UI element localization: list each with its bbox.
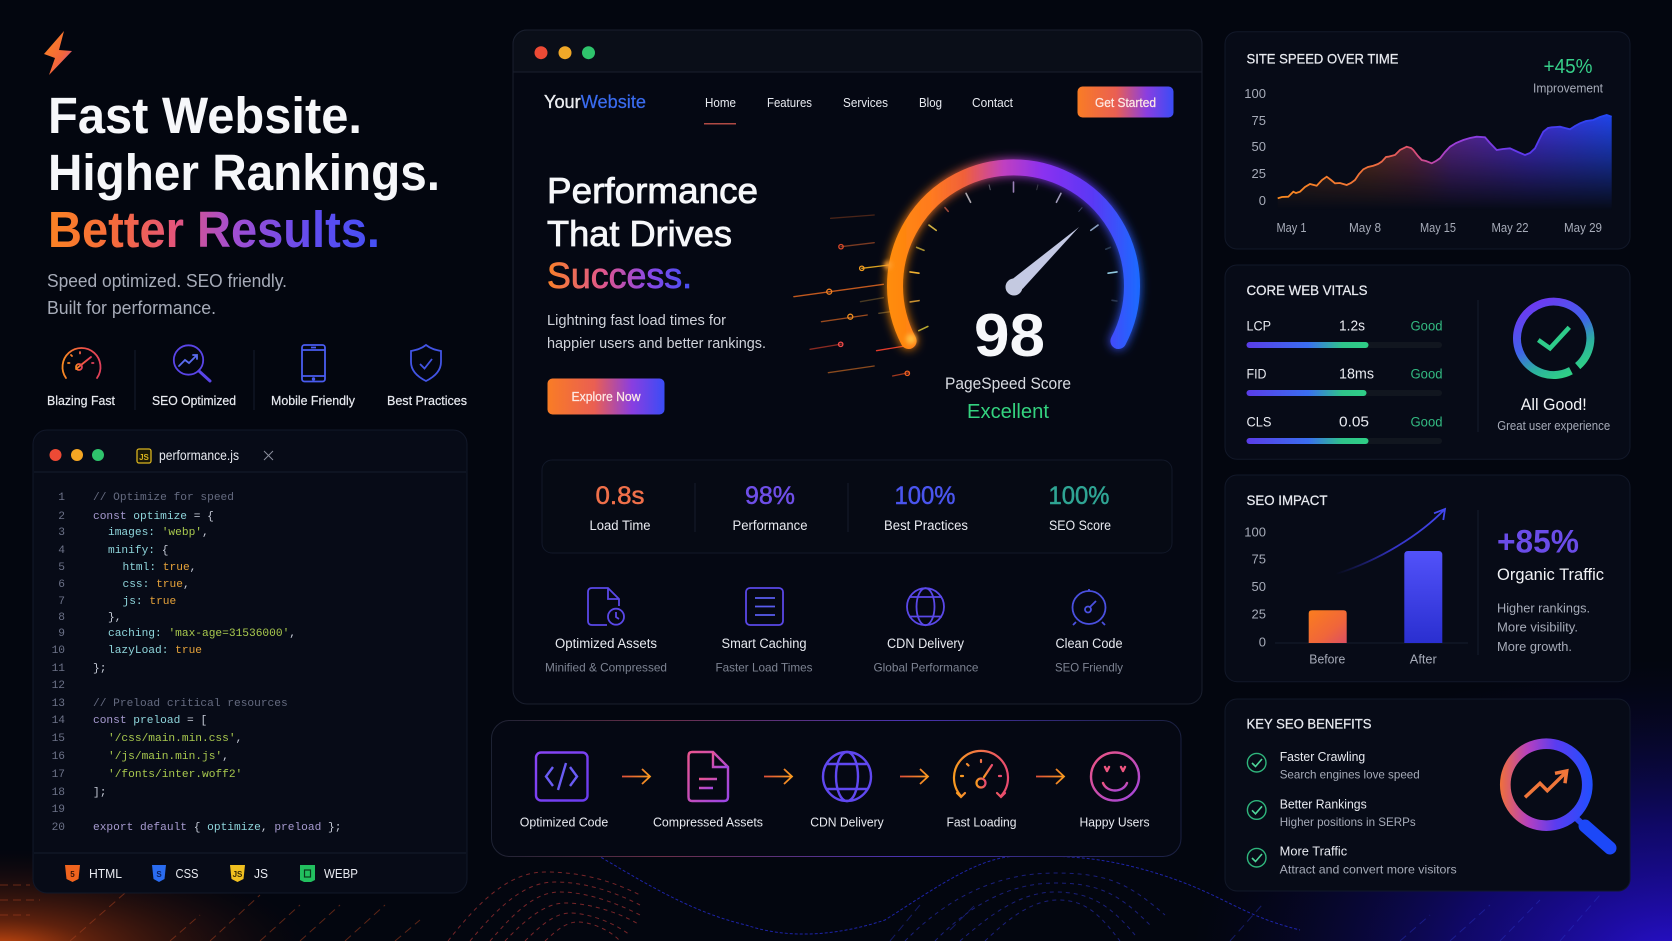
icon: lightning bolt logo xyxy=(44,31,72,75)
arrow xyxy=(1036,769,1064,784)
navigation xyxy=(704,96,1013,124)
title: Fast Website. xyxy=(48,87,362,144)
hero heading: Performance xyxy=(547,170,758,211)
code listing: 4 xyxy=(58,545,65,557)
area chart xyxy=(1244,86,1612,235)
feature: Optimized Assets: Optimized Assets xyxy=(555,636,657,651)
bar chart: 100 xyxy=(1244,524,1266,540)
button: Get Started: Get Started xyxy=(1095,96,1156,110)
code listing: caching: 'max-age=31536000', xyxy=(108,628,296,640)
label: All Good: All Good! xyxy=(1521,395,1587,414)
step: Compressed Assets xyxy=(653,752,763,830)
code listing: 15 xyxy=(52,733,65,745)
tech tags: HTML, CSS, JS, WEBP: WEBP xyxy=(324,866,358,881)
metric: CLS: Good xyxy=(1410,414,1442,430)
area chart: May 8 xyxy=(1349,221,1381,235)
code listing: 11 xyxy=(52,663,65,675)
feature: CDN Delivery: CDN Delivery xyxy=(887,636,964,651)
subtitle text: Speed optimized. SEO friendly. xyxy=(47,270,287,291)
step: CDN Delivery xyxy=(810,752,884,830)
code listing: 20 xyxy=(52,822,65,834)
area chart: 50 xyxy=(1252,139,1266,154)
code listing: css: true, xyxy=(122,579,190,591)
feature: Smart Caching xyxy=(716,588,812,674)
area chart: May 1 xyxy=(1276,221,1307,235)
tech tags: HTML, CSS, JS, WEBP: JS xyxy=(254,866,268,881)
metric: LCP: LCP xyxy=(1246,318,1271,334)
benefit: Better Rankings xyxy=(1247,797,1416,829)
step: Optimized Code: Optimized Code xyxy=(520,814,608,830)
code listing: html: true, xyxy=(122,562,196,574)
bar chart: 0 xyxy=(1259,634,1266,650)
text block: benefits: More growth. xyxy=(1497,639,1572,654)
stat: performance xyxy=(732,482,808,533)
title xyxy=(48,87,440,258)
panel: optimization pipeline xyxy=(492,720,1181,856)
tech tags: HTML, CSS, JS, WEBP: JS xyxy=(233,870,243,879)
benefit: Better Rankings: Higher positions in SERPs xyxy=(1280,815,1416,829)
button: Explore Now xyxy=(548,378,664,414)
navigation: Blog xyxy=(919,96,942,110)
label: Best Practices: Best Practices xyxy=(387,393,467,408)
step: Fast Loading xyxy=(946,751,1016,830)
benefit: More Traffic: More Traffic xyxy=(1280,845,1347,859)
code listing: 7 xyxy=(58,596,65,608)
arrow xyxy=(764,769,792,784)
step: Compressed Assets: Compressed Assets xyxy=(653,814,763,830)
icon: mobile phone xyxy=(302,345,325,382)
step: Fast Loading: Fast Loading xyxy=(946,814,1016,830)
area chart: 75 xyxy=(1252,113,1266,128)
panel: code editor xyxy=(33,430,467,893)
panel: core web vitals xyxy=(1225,265,1630,459)
arrow xyxy=(622,769,650,784)
code listing: '/js/main.min.js', xyxy=(108,751,229,763)
bar chart: Before xyxy=(1309,652,1345,666)
code listing: 13 xyxy=(52,698,65,710)
feature: Optimized Assets: Minified & Compressed xyxy=(545,660,667,674)
feature: CDN Delivery: Global Performance xyxy=(874,660,979,674)
code listing: const optimize = { xyxy=(93,511,214,523)
feature row: Blazing Fast, SEO Optimized, Mobile Friendly, Best Practices xyxy=(47,345,467,410)
status ring xyxy=(1504,289,1603,388)
step: Optimized Code xyxy=(520,752,608,830)
hero paragraph xyxy=(547,313,766,352)
feature: Smart Caching: Smart Caching xyxy=(722,636,806,651)
stat: load time: 0.8s xyxy=(596,482,644,510)
benefit: Faster Crawling xyxy=(1247,750,1420,781)
hero heading: That Drives xyxy=(547,213,732,254)
icon: shield check xyxy=(411,345,441,381)
code listing: '/fonts/inter.woff2' xyxy=(108,769,242,781)
speed streaks xyxy=(794,215,911,376)
icon: growth magnifier xyxy=(1505,744,1610,848)
code listing: 6 xyxy=(58,579,65,591)
code listing: 2 xyxy=(58,511,65,523)
area chart: May 29 xyxy=(1564,221,1602,235)
code listing: lazyLoad: true xyxy=(108,645,202,657)
code listing: // Preload critical resources xyxy=(93,698,288,710)
area chart: May 22 xyxy=(1492,221,1529,235)
code listing: ]; xyxy=(93,787,106,799)
stat: best practices: 100% xyxy=(894,482,956,510)
navigation: Features xyxy=(767,96,812,110)
metric: CLS xyxy=(1246,414,1442,444)
feature: Clean Code xyxy=(1055,589,1123,674)
step: Happy Users xyxy=(1080,752,1150,830)
tech tags: HTML, CSS, JS, WEBP: S xyxy=(156,870,162,879)
area chart: May 15 xyxy=(1420,221,1456,235)
stat: +45% improvement xyxy=(1533,56,1603,96)
gauge: PageSpeed arc, ticks and needle xyxy=(884,167,1132,344)
panel: site speed over time xyxy=(1225,32,1630,249)
stat: performance: Performance xyxy=(732,518,808,533)
feature: Optimized Assets xyxy=(545,588,667,674)
file tab: performance.js xyxy=(137,448,273,463)
feature: Clean Code: SEO Friendly xyxy=(1055,660,1123,674)
navigation: Home xyxy=(705,96,736,110)
area chart: 100 xyxy=(1244,86,1266,101)
metric: LCP: Good xyxy=(1410,318,1442,334)
metric: FID xyxy=(1246,366,1442,396)
code listing: // Optimize for speed xyxy=(93,492,234,504)
code listing: 16 xyxy=(52,751,65,763)
stat: SEO score: 100% xyxy=(1048,482,1110,510)
panel: key SEO benefits xyxy=(1225,699,1630,891)
stat: +45% improvement: +45% xyxy=(1544,56,1593,78)
code listing: 10 xyxy=(52,645,65,657)
file tab: performance.js: JS xyxy=(139,453,150,462)
stats strip xyxy=(542,460,1172,553)
heading: KEY SEO BENEFITS xyxy=(1246,715,1372,731)
code listing: 18 xyxy=(52,787,65,799)
window controls xyxy=(50,449,104,461)
stat: SEO score xyxy=(1048,482,1111,533)
hero paragraph: Lightning fast load times for xyxy=(547,313,726,329)
code listing: 3 xyxy=(58,527,65,539)
metric: FID: Good xyxy=(1410,366,1442,382)
button: Get Started xyxy=(1078,86,1174,118)
benefit: Faster Crawling: Faster Crawling xyxy=(1280,750,1365,764)
code listing: images: 'webp', xyxy=(108,527,209,539)
stat: best practices xyxy=(884,482,968,533)
label: great user experience: Great user experience xyxy=(1497,419,1610,433)
metric: LCP xyxy=(1246,318,1442,348)
label: Excellent: Excellent xyxy=(967,401,1049,423)
stat: +85%: +85% xyxy=(1497,524,1579,560)
icon: blazing fast gauge xyxy=(62,348,100,378)
step: CDN Delivery: CDN Delivery xyxy=(810,814,884,830)
tech tags: HTML, CSS, JS, WEBP xyxy=(65,865,358,882)
logo: YourWebsite: YourWebsite xyxy=(544,92,646,112)
label: Blazing Fast: Blazing Fast xyxy=(47,393,115,408)
code listing: 8 xyxy=(58,612,65,624)
stat: load time xyxy=(590,482,650,533)
stat: SEO score: SEO Score xyxy=(1049,518,1111,533)
stat: best practices: Best Practices xyxy=(884,518,968,533)
code listing: minify: { xyxy=(108,545,168,557)
tech tags: HTML, CSS, JS, WEBP: CSS xyxy=(176,866,199,881)
code listing xyxy=(52,492,341,834)
label: PageSpeed Score: PageSpeed Score xyxy=(945,375,1071,393)
metric: CLS: CLS xyxy=(1246,414,1272,430)
code listing: js: true xyxy=(122,596,176,608)
code listing: 14 xyxy=(52,715,65,727)
metric: FID: 18ms xyxy=(1339,366,1374,382)
feature: Smart Caching: Faster Load Times xyxy=(716,660,812,674)
code listing: 19 xyxy=(52,804,65,816)
stat: load time: Load Time xyxy=(590,518,650,533)
tech tags: HTML, CSS, JS, WEBP: 5 xyxy=(70,870,75,879)
text block: benefits: Higher rankings. xyxy=(1497,600,1590,615)
metric: FID: FID xyxy=(1246,366,1266,382)
tech tags: HTML, CSS, JS, WEBP: HTML xyxy=(89,866,122,881)
code listing: }; xyxy=(93,663,106,675)
score: 98: 98 xyxy=(974,302,1045,369)
title: Higher Rankings. xyxy=(48,144,440,201)
feature: CDN Delivery xyxy=(874,588,979,674)
benefit: More Traffic xyxy=(1247,845,1457,876)
code listing: export default { optimize, preload }; xyxy=(93,822,341,834)
title: Better Results. xyxy=(48,201,380,258)
panel: SEO impact xyxy=(1225,475,1630,682)
step: Happy Users: Happy Users xyxy=(1080,814,1150,830)
code listing: 9 xyxy=(58,628,65,640)
benefit: Better Rankings: Better Rankings xyxy=(1280,797,1367,811)
navigation: Contact xyxy=(972,96,1013,110)
code listing: 5 xyxy=(58,562,65,574)
metric: CLS: 0.05 xyxy=(1339,414,1369,430)
bar chart: 50 xyxy=(1252,579,1266,594)
bar chart: 25 xyxy=(1252,606,1266,622)
file tab: performance.js: performance.js xyxy=(159,448,239,463)
heading: SITE SPEED OVER TIME xyxy=(1246,50,1398,66)
code listing: 1 xyxy=(58,492,65,504)
hero heading xyxy=(547,170,758,296)
bar chart xyxy=(1244,524,1468,666)
code listing: 17 xyxy=(52,769,65,781)
label: Organic Traffic: Organic Traffic xyxy=(1497,565,1604,584)
arrow: growth trend xyxy=(1336,509,1445,574)
navigation: Services xyxy=(843,96,888,110)
bar chart: 75 xyxy=(1252,552,1266,566)
heading: CORE WEB VITALS xyxy=(1246,282,1368,298)
stat: performance: 98% xyxy=(745,482,795,510)
subtitle text: Built for performance. xyxy=(47,297,216,318)
feature: Clean Code: Clean Code xyxy=(1056,636,1122,651)
bar chart: After xyxy=(1410,652,1437,666)
label: Mobile Friendly: Mobile Friendly xyxy=(271,393,355,408)
button: Explore Now: Explore Now xyxy=(572,390,641,404)
area chart: 25 xyxy=(1252,166,1266,181)
hero heading: Success. xyxy=(547,255,692,296)
text block: benefits: More visibility. xyxy=(1497,620,1578,635)
hero paragraph: happier users and better rankings. xyxy=(547,336,766,352)
window controls xyxy=(534,46,595,59)
code listing: }, xyxy=(108,612,121,624)
area chart: 0 xyxy=(1259,193,1266,208)
stat: +45% improvement: Improvement xyxy=(1533,82,1603,96)
icon: SEO magnifier xyxy=(174,345,210,381)
text block: benefits xyxy=(1497,600,1590,654)
heading: SEO IMPACT xyxy=(1246,492,1328,508)
panel: browser window xyxy=(513,30,1202,704)
code listing: 12 xyxy=(52,680,65,692)
code listing: '/css/main.min.css', xyxy=(108,733,242,745)
code listing: const preload = [ xyxy=(93,715,207,727)
metric: LCP: 1.2s xyxy=(1339,318,1365,334)
benefit: More Traffic: Attract and convert more visitors xyxy=(1280,862,1457,876)
label: SEO Optimized: SEO Optimized xyxy=(152,393,236,408)
benefit: Faster Crawling: Search engines love speed xyxy=(1280,767,1420,781)
subtitle text xyxy=(47,270,287,318)
arrow xyxy=(900,769,928,784)
